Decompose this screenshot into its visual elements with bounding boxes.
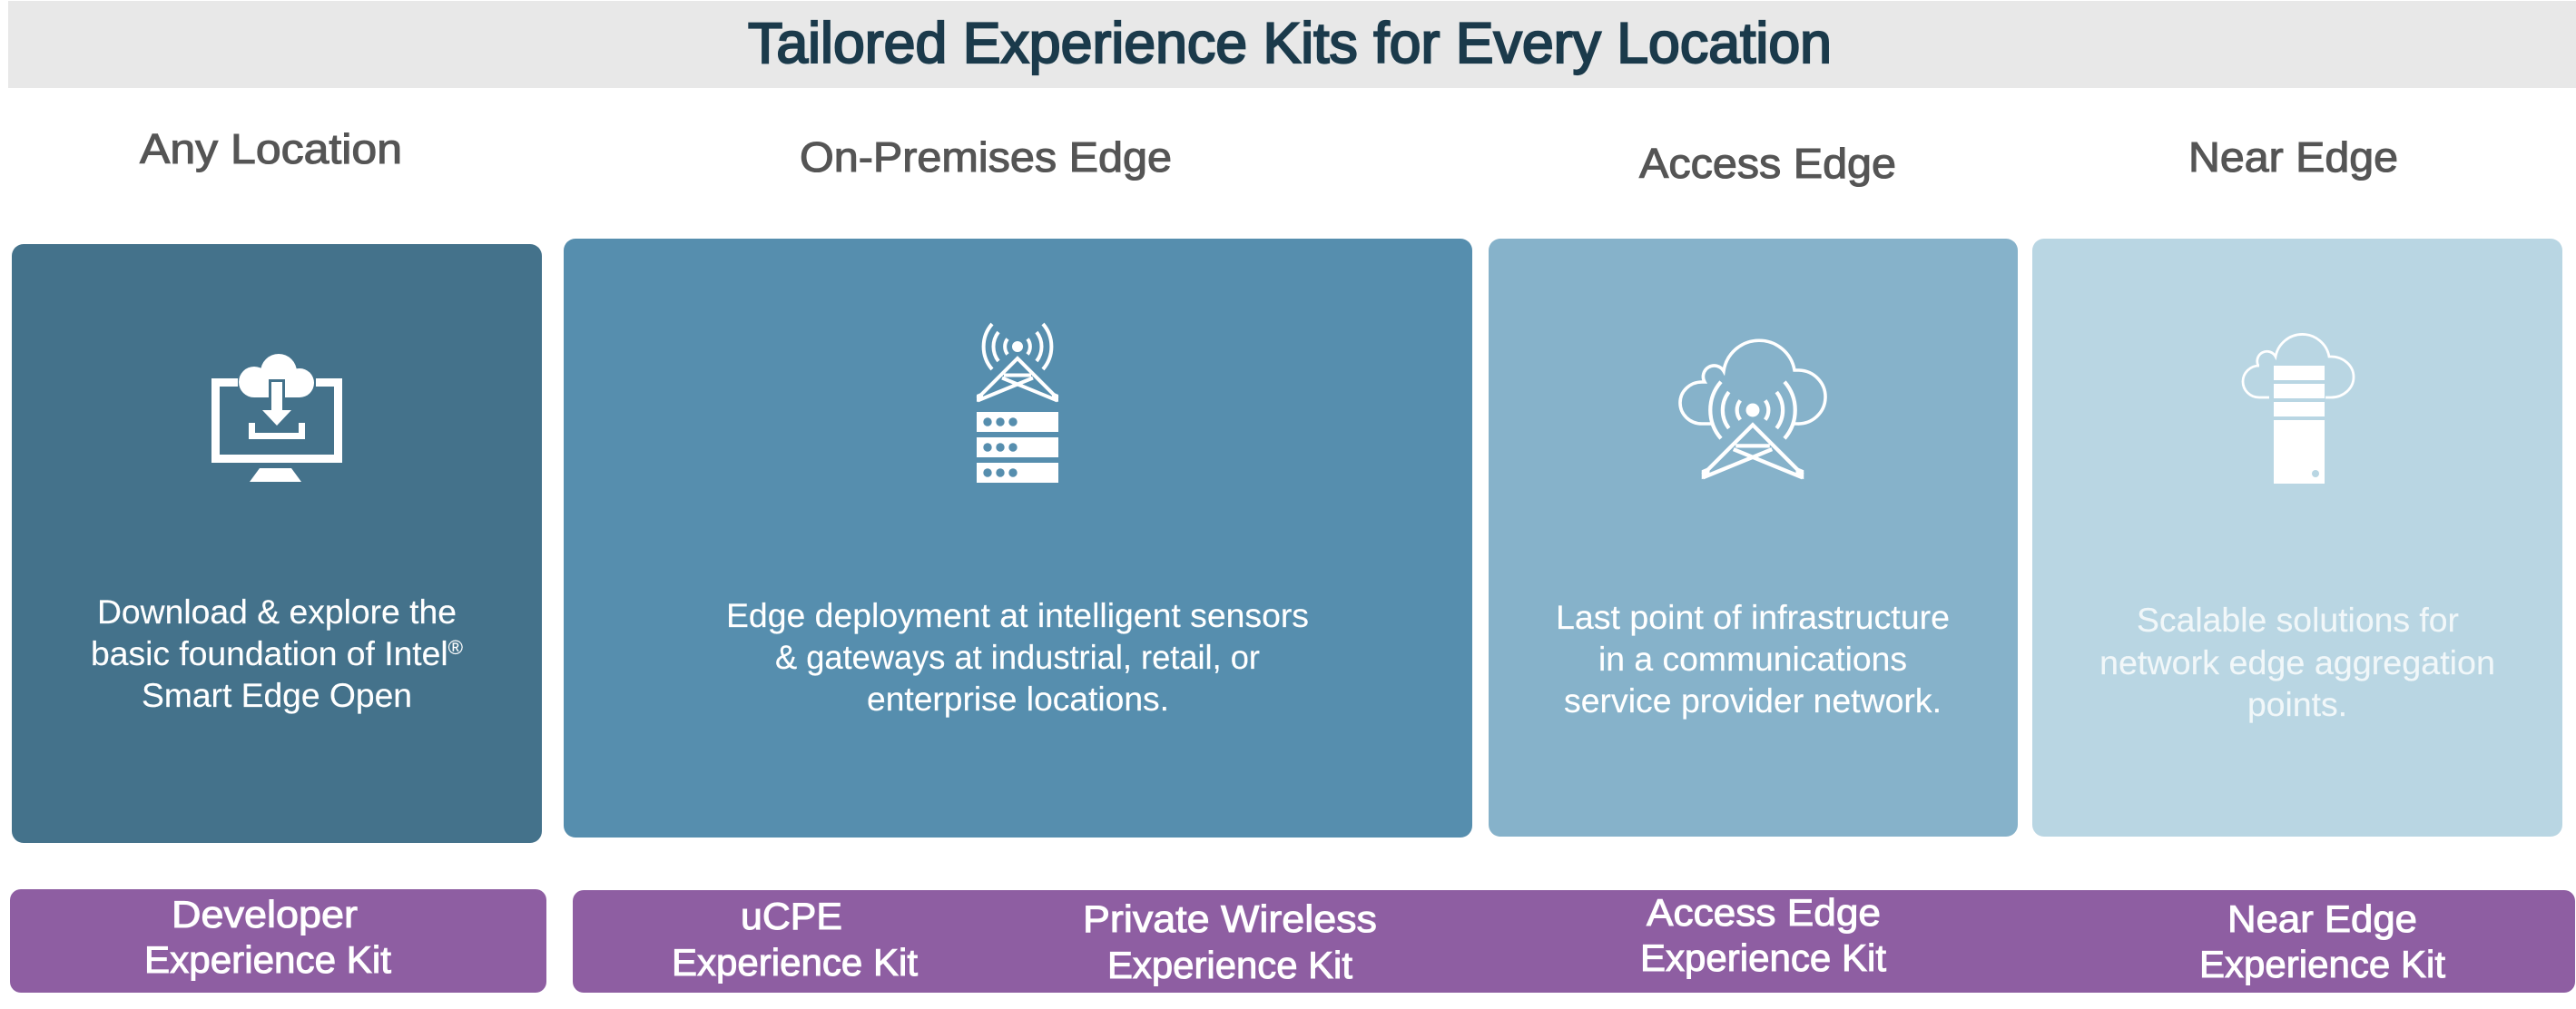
text: any location description: Download & explore the	[97, 593, 457, 631]
text: any location description	[91, 593, 463, 714]
label: access edge experience kit: Experience Kit	[1640, 936, 1886, 979]
text: near edge description	[2099, 602, 2495, 723]
label: ucpe experience kit: Experience Kit	[672, 941, 918, 984]
label: developer experience kit: Experience Kit	[144, 938, 391, 981]
text: near edge description: points.	[2247, 686, 2347, 723]
label: private wireless experience kit	[1083, 897, 1377, 986]
label: ucpe experience kit: uCPE	[741, 895, 842, 937]
label: near edge experience kit	[2199, 897, 2445, 985]
text: on-premises edge description: & gateways at industrial, retail, or	[775, 639, 1260, 676]
panel: access edge	[1489, 239, 2018, 837]
heading: on-premises edge: On-Premises Edge	[800, 133, 1172, 181]
title: Tailored Experience Kits for Every Location	[748, 12, 1832, 75]
text: any location description: Smart Edge Open	[142, 677, 412, 714]
label: developer experience kit	[144, 893, 391, 981]
label: near edge experience kit: Experience Kit	[2199, 943, 2445, 985]
icon: cell tower above server rack	[977, 324, 1058, 483]
panel: any location	[12, 244, 542, 843]
label: near edge experience kit: Near Edge	[2227, 897, 2417, 940]
icon: cloud download to monitor	[216, 354, 338, 482]
label: access edge experience kit: Access Edge	[1647, 891, 1881, 934]
text: any location description: basic foundation of Intel	[91, 635, 446, 672]
text: any location description: ®	[448, 636, 463, 659]
icon: cloud with cell tower	[1680, 340, 1825, 479]
icon part: server rack	[977, 412, 1058, 483]
title banner	[8, 1, 2576, 88]
text: near edge description: network edge aggregation	[2099, 644, 2495, 681]
text: access edge description	[1556, 599, 1950, 720]
text: access edge description: Last point of infrastructure	[1556, 599, 1950, 636]
kit bar: shared edge kits	[573, 890, 2575, 993]
label: private wireless experience kit: Private Wireless	[1083, 897, 1377, 940]
heading: any location: Any Location	[140, 125, 402, 172]
panel: near edge	[2032, 239, 2562, 837]
text: on-premises edge description: enterprise locations.	[867, 681, 1169, 718]
text: near edge description: Scalable solutions for	[2137, 602, 2459, 639]
label: developer experience kit: Developer	[172, 893, 358, 936]
label: access edge experience kit	[1640, 891, 1886, 979]
text: access edge description: service provider network.	[1564, 682, 1942, 720]
panel: on-premises edge	[564, 239, 1472, 838]
text: access edge description: in a communications	[1598, 641, 1907, 678]
icon part: tower with signal	[977, 324, 1058, 402]
kit bar: developer	[10, 889, 546, 993]
heading: access edge: Access Edge	[1639, 140, 1896, 187]
label: private wireless experience kit: Experience Kit	[1107, 944, 1352, 986]
icon: cloud with server tower	[2243, 334, 2354, 484]
heading: near edge: Near Edge	[2188, 133, 2398, 181]
text: on-premises edge description: Edge deployment at intelligent sensors	[726, 597, 1309, 634]
text: on-premises edge description	[726, 597, 1309, 718]
label: ucpe experience kit	[672, 895, 918, 984]
